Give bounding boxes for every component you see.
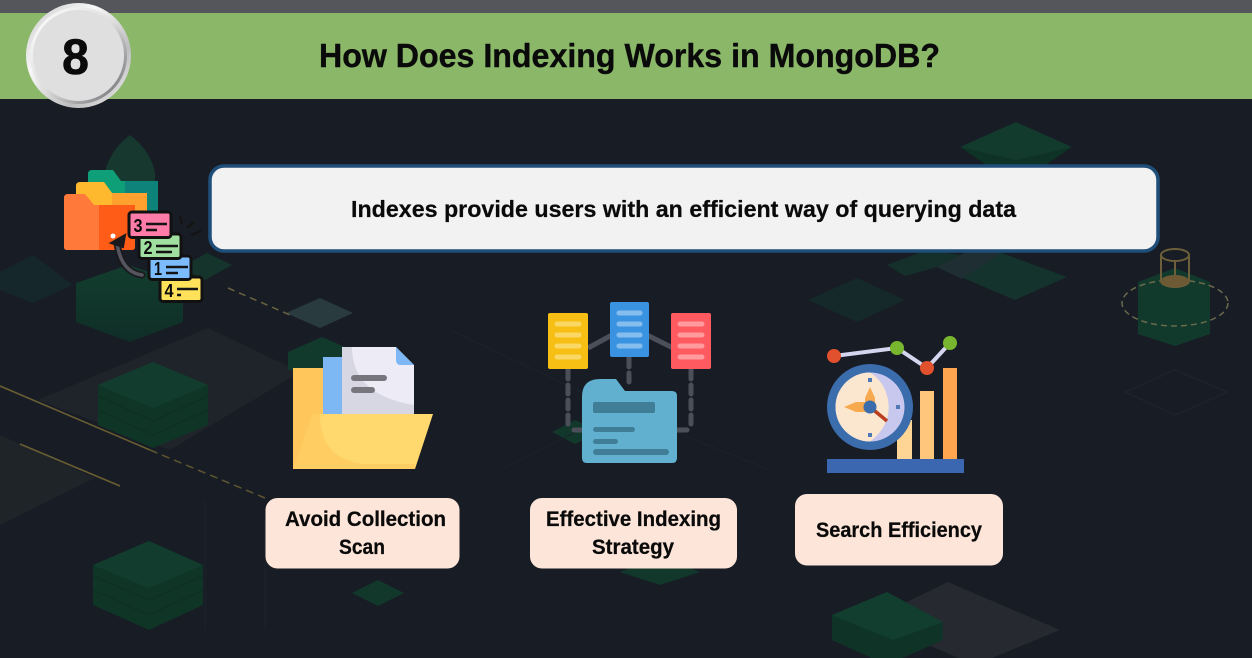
label: search efficiency <box>795 494 1003 566</box>
callout: main statement <box>210 166 1158 251</box>
label: effective indexing strategy: Strategy <box>592 536 674 559</box>
icon: clock with bar chart <box>827 336 964 473</box>
number badge: 8 <box>62 29 89 85</box>
header bar <box>0 0 1252 99</box>
icon: folders with numbered index cards: 3 <box>134 216 142 236</box>
title: How Does Indexing Works in MongoDB? <box>319 37 940 74</box>
icon: folders with numbered index cards <box>64 170 202 302</box>
number badge <box>26 3 131 108</box>
callout: main statement: Indexes provide users with an efficient way of querying data <box>351 196 1017 222</box>
icon: open folder with documents <box>293 347 433 469</box>
label: search efficiency: Search Efficiency <box>816 519 982 542</box>
label: effective indexing strategy <box>530 498 737 568</box>
label: avoid collection scan <box>266 498 460 568</box>
icon: database folder with index cards <box>548 302 711 463</box>
label: avoid collection scan: Avoid Collection <box>285 508 446 531</box>
icon: folders with numbered index cards: 4 <box>164 281 174 301</box>
label: avoid collection scan: Scan <box>339 536 385 559</box>
icon: folders with numbered index cards: 1 <box>154 259 162 279</box>
label: effective indexing strategy: Effective Indexing <box>546 508 721 531</box>
icon: folders with numbered index cards: 2 <box>144 238 152 258</box>
